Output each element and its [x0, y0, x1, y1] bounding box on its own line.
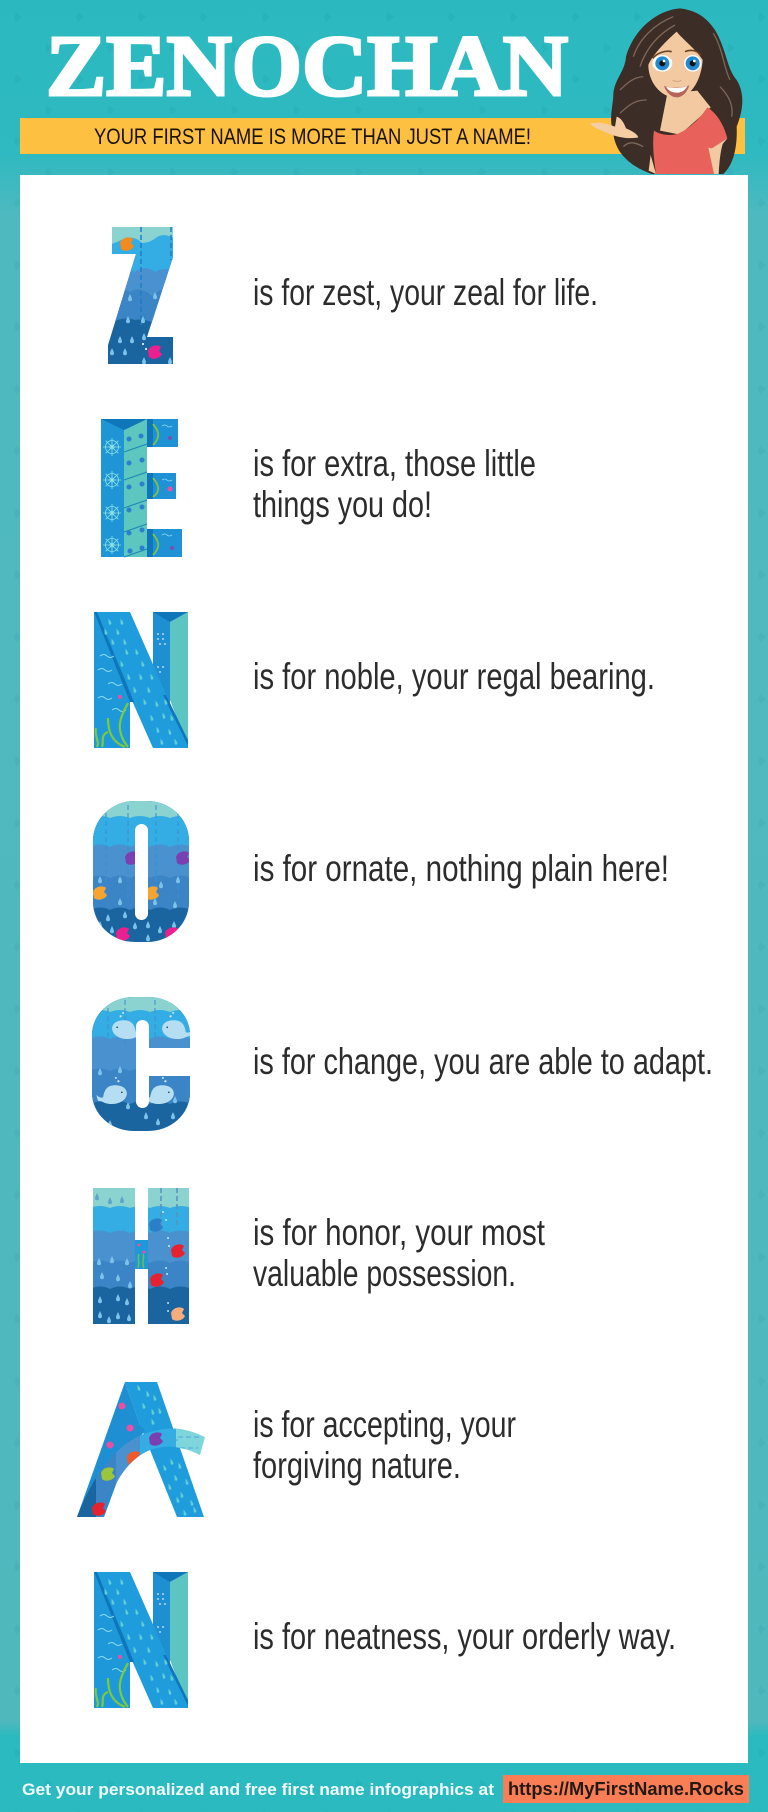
text: A line: forgiving nature. — [253, 1445, 461, 1486]
text: E line — [253, 443, 536, 525]
title: ZENOCHAN — [46, 17, 568, 114]
footer text: Get your personalized and free first name infographics at — [22, 1780, 494, 1799]
letter E — [101, 419, 182, 557]
text: A line — [253, 1404, 516, 1486]
letter N (second) — [94, 1572, 188, 1708]
text: N line: is for noble, your regal bearing. — [253, 656, 655, 697]
letter C — [90, 995, 193, 1133]
footer link — [503, 1775, 749, 1803]
letter H — [90, 1186, 192, 1326]
subtitle banner: YOUR FIRST NAME IS MORE THAN JUST A NAME! — [94, 124, 531, 149]
character illustration — [590, 8, 742, 174]
letter N — [94, 612, 188, 748]
text: E line: things you do! — [253, 484, 432, 525]
text: H line: is for honor, your most — [253, 1212, 546, 1253]
text: O line: is for ornate, nothing plain here! — [253, 848, 669, 889]
text: A line: is for accepting, your — [253, 1404, 516, 1445]
letter O — [90, 799, 192, 944]
footer link: https://MyFirstName.Rocks — [508, 1779, 744, 1799]
letter A — [70, 1382, 208, 1520]
letter Z — [108, 227, 173, 364]
subtitle banner — [20, 118, 745, 154]
text: E line: is for extra, those little — [253, 443, 536, 484]
text: H line: valuable possession. — [253, 1253, 516, 1294]
text: Z line: is for zest, your zeal for life. — [253, 272, 598, 313]
text: H line — [253, 1212, 546, 1294]
